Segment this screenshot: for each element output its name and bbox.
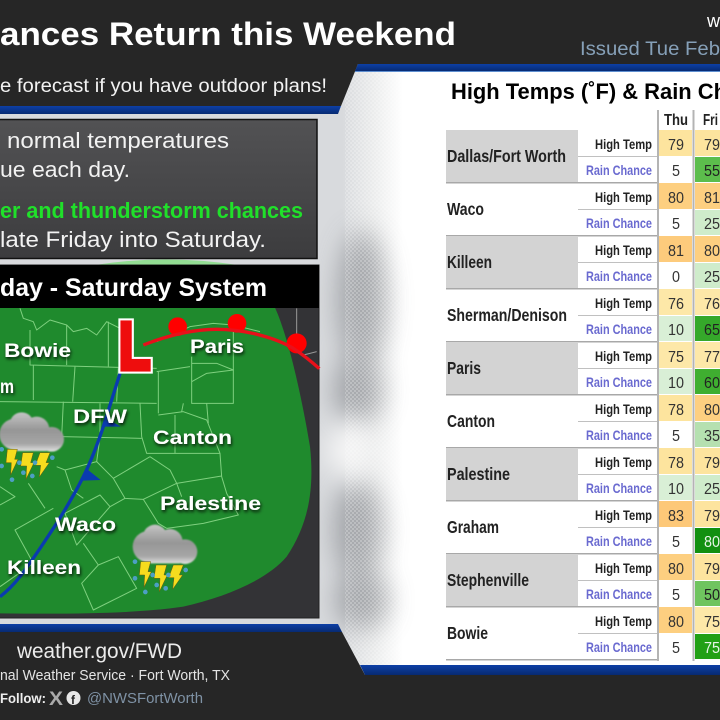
row: Palestine: 78 — [668, 455, 684, 472]
row: Canton: Canton — [447, 411, 495, 431]
row: Waco: 80 — [668, 190, 684, 207]
icon: Facebook — [66, 691, 80, 707]
row: Graham: Rain Chance — [586, 533, 652, 549]
icon: storm cloud east — [133, 525, 197, 594]
row: Dallas/Fort Worth: Rain Chance — [586, 162, 652, 178]
row: Stephenville: 5 — [672, 587, 680, 604]
row: Stephenville: Stephenville — [447, 570, 529, 590]
row: Sherman/Denison: 10 — [668, 322, 684, 339]
row: Stephenville — [446, 554, 720, 608]
row: Killeen: Rain Chance — [586, 268, 652, 284]
low pressure symbol: L — [119, 310, 150, 384]
row: Graham: 5 — [672, 534, 680, 551]
social handle: @NWSFortWorth — [87, 690, 203, 707]
footer follow: Follow: — [0, 690, 46, 706]
row: Sherman/Denison — [446, 289, 720, 342]
subtitle: e forecast if you have outdoor plans! — [0, 76, 327, 97]
row: Palestine: 10 — [668, 481, 684, 498]
panel: forecast summary — [0, 120, 317, 258]
city labels: Killeen — [7, 558, 81, 579]
row: Canton: Rain Chance — [586, 427, 652, 443]
row: Dallas/Fort Worth: 5 — [672, 163, 680, 180]
row: Paris — [446, 342, 720, 396]
city labels: Waco — [55, 515, 116, 536]
row: Palestine: Rain Chance — [586, 480, 652, 496]
county lines — [0, 308, 317, 610]
row: Killeen: 0 — [672, 269, 680, 286]
column header Thu: Thu — [664, 112, 688, 129]
green area peeking above map — [95, 260, 238, 265]
row: Paris: Paris — [447, 358, 481, 378]
row: Waco: Rain Chance — [586, 215, 652, 231]
row: Graham: Graham — [447, 517, 499, 537]
row: Graham: 83 — [668, 508, 684, 525]
row: Waco: 5 — [672, 216, 680, 233]
row: Paris: 75 — [668, 349, 684, 366]
city labels: Paris — [190, 337, 244, 358]
city labels — [0, 337, 261, 579]
footer website: weather.gov/FWD — [16, 640, 182, 663]
row: Palestine — [446, 448, 720, 502]
icon: Facebook: f — [71, 693, 76, 707]
row: Graham: High Temp — [595, 507, 652, 523]
rain area — [0, 308, 311, 614]
map heading: day - Saturday System — [0, 274, 267, 302]
warm front — [143, 314, 319, 369]
row: Stephenville: 80 — [668, 561, 684, 578]
top right office label: w — [706, 11, 720, 31]
row: Sherman/Denison: Rain Chance — [586, 321, 652, 337]
city labels: DFW — [73, 407, 127, 428]
panel: system map — [0, 265, 319, 618]
row: Canton: 78 — [668, 402, 684, 419]
icon: X: X — [49, 689, 63, 710]
row: Sherman/Denison: High Temp — [595, 295, 652, 311]
row: Bowie: 80 — [668, 614, 684, 631]
row: Killeen — [446, 236, 720, 290]
city labels: m — [0, 377, 14, 398]
row: Canton: High Temp — [595, 401, 652, 417]
row: Dallas/Fort Worth: High Temp — [595, 136, 652, 152]
icon: storm cloud west — [0, 412, 64, 482]
row: Bowie — [446, 607, 720, 660]
map heading — [0, 265, 319, 308]
issued date: Issued Tue Feb — [580, 39, 720, 60]
table title: High Temps (˚F) & Rain Ch — [451, 79, 720, 104]
row: Dallas/Fort Worth: Dallas/Fort Worth — [447, 146, 566, 166]
row: Killeen: Killeen — [447, 252, 492, 272]
title: ances Return this Weekend — [0, 16, 456, 52]
row: Paris: Rain Chance — [586, 374, 652, 390]
row: Stephenville: Rain Chance — [586, 586, 652, 602]
text: rain chances highlight: er and thunderstorm chances — [0, 198, 303, 223]
row: Canton: 5 — [672, 428, 680, 445]
row: Bowie: High Temp — [595, 613, 652, 629]
top header bar — [0, 0, 720, 114]
city labels: Bowie — [4, 341, 71, 362]
city labels: Canton — [153, 428, 232, 449]
row: Waco — [446, 183, 720, 236]
footer follow — [0, 689, 203, 710]
city labels: Palestine — [160, 494, 261, 515]
row: Killeen: 81 — [668, 243, 684, 260]
row: Bowie: 5 — [672, 640, 680, 657]
cold front — [0, 373, 121, 597]
row: Sherman/Denison: Sherman/Denison — [447, 305, 567, 325]
row: Canton — [446, 395, 720, 448]
row: Bowie: Bowie — [447, 623, 488, 643]
row: Dallas/Fort Worth — [446, 130, 720, 184]
footer office: nal Weather Service · Fort Worth, TX — [0, 667, 230, 684]
row: Killeen: High Temp — [595, 242, 652, 258]
row: Waco: Waco — [447, 199, 484, 219]
panel: forecast summary: late Friday into Saturday. — [0, 227, 266, 252]
row: Palestine: High Temp — [595, 454, 652, 470]
row: Paris: 10 — [668, 375, 684, 392]
row: Graham — [446, 501, 720, 554]
row: Paris: High Temp — [595, 348, 652, 364]
footer bar — [0, 624, 720, 720]
row: Stephenville: High Temp — [595, 560, 652, 576]
map drawing — [0, 308, 319, 614]
row: Sherman/Denison: 76 — [668, 296, 684, 313]
text: temperatures: normal temperatures — [7, 128, 229, 153]
row: Waco: High Temp — [595, 189, 652, 205]
row: Dallas/Fort Worth: 79 — [668, 137, 684, 154]
table: high temps and rain chance — [446, 110, 720, 661]
panel: forecast summary: ue each day. — [0, 157, 130, 182]
row: Bowie: Rain Chance — [586, 639, 652, 655]
row: Palestine: Palestine — [447, 464, 510, 484]
